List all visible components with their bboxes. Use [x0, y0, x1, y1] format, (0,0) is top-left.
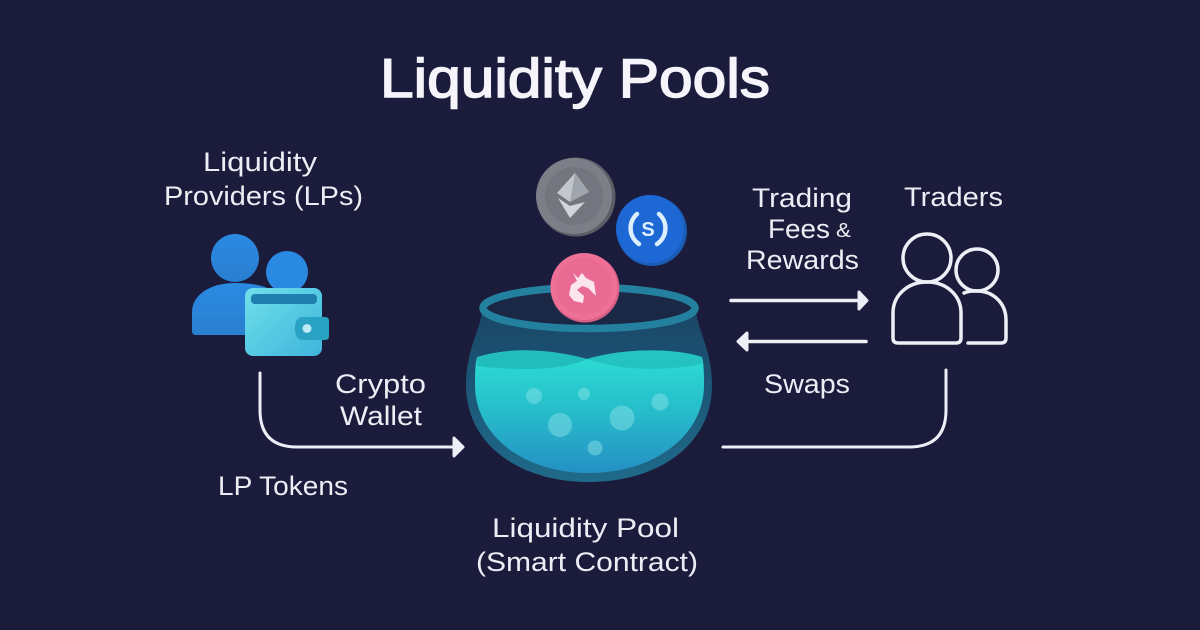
water: [475, 350, 704, 473]
pot rim: [483, 288, 695, 328]
water wave: [477, 350, 587, 369]
icon: liquidity providers and wallet: [192, 234, 329, 356]
icon: traders: [893, 234, 1006, 343]
icon: pink coin: [550, 253, 620, 322]
label: trading fees and rewards: &: [836, 220, 852, 242]
icon: small person: [266, 251, 308, 293]
arrow: providers to pool: [260, 373, 463, 456]
label: liquidity providers: Liquidity: [203, 147, 318, 177]
label: LP tokens: LP Tokens: [218, 471, 348, 501]
label: liquidity pool: (Smart Contract): [476, 547, 698, 577]
label: swaps: Swaps: [764, 369, 850, 399]
arrow: swaps from traders: [738, 333, 866, 350]
label: liquidity pool: [476, 513, 698, 577]
arrow: fees to traders: [731, 292, 867, 309]
bubbles: [526, 388, 668, 456]
label: crypto wallet: Crypto: [335, 369, 426, 399]
icon: large person: [192, 234, 272, 335]
label: liquidity pool: Liquidity Pool: [492, 513, 679, 543]
label: traders: Traders: [904, 182, 1003, 212]
pot body: [466, 308, 712, 482]
icon: pot: [466, 288, 712, 482]
label: trading fees and rewards: Fees: [768, 214, 830, 244]
label: trading fees and rewards: Rewards: [746, 245, 859, 275]
title: Liquidity Pools: [380, 47, 770, 109]
label: trading fees and rewards: [746, 183, 859, 275]
icon: usdc coin: [616, 195, 687, 266]
label: liquidity providers: Providers (LPs): [164, 181, 363, 211]
icon: usdc coin: S: [641, 219, 655, 241]
label: trading fees and rewards: Trading: [752, 183, 852, 213]
icon: wallet: [245, 288, 329, 356]
arrow: traders to pool: [723, 370, 946, 447]
label: liquidity providers: [164, 147, 363, 211]
label: crypto wallet: Wallet: [340, 401, 423, 431]
icon: ether coin: [536, 158, 616, 236]
label: crypto wallet: [335, 369, 426, 431]
